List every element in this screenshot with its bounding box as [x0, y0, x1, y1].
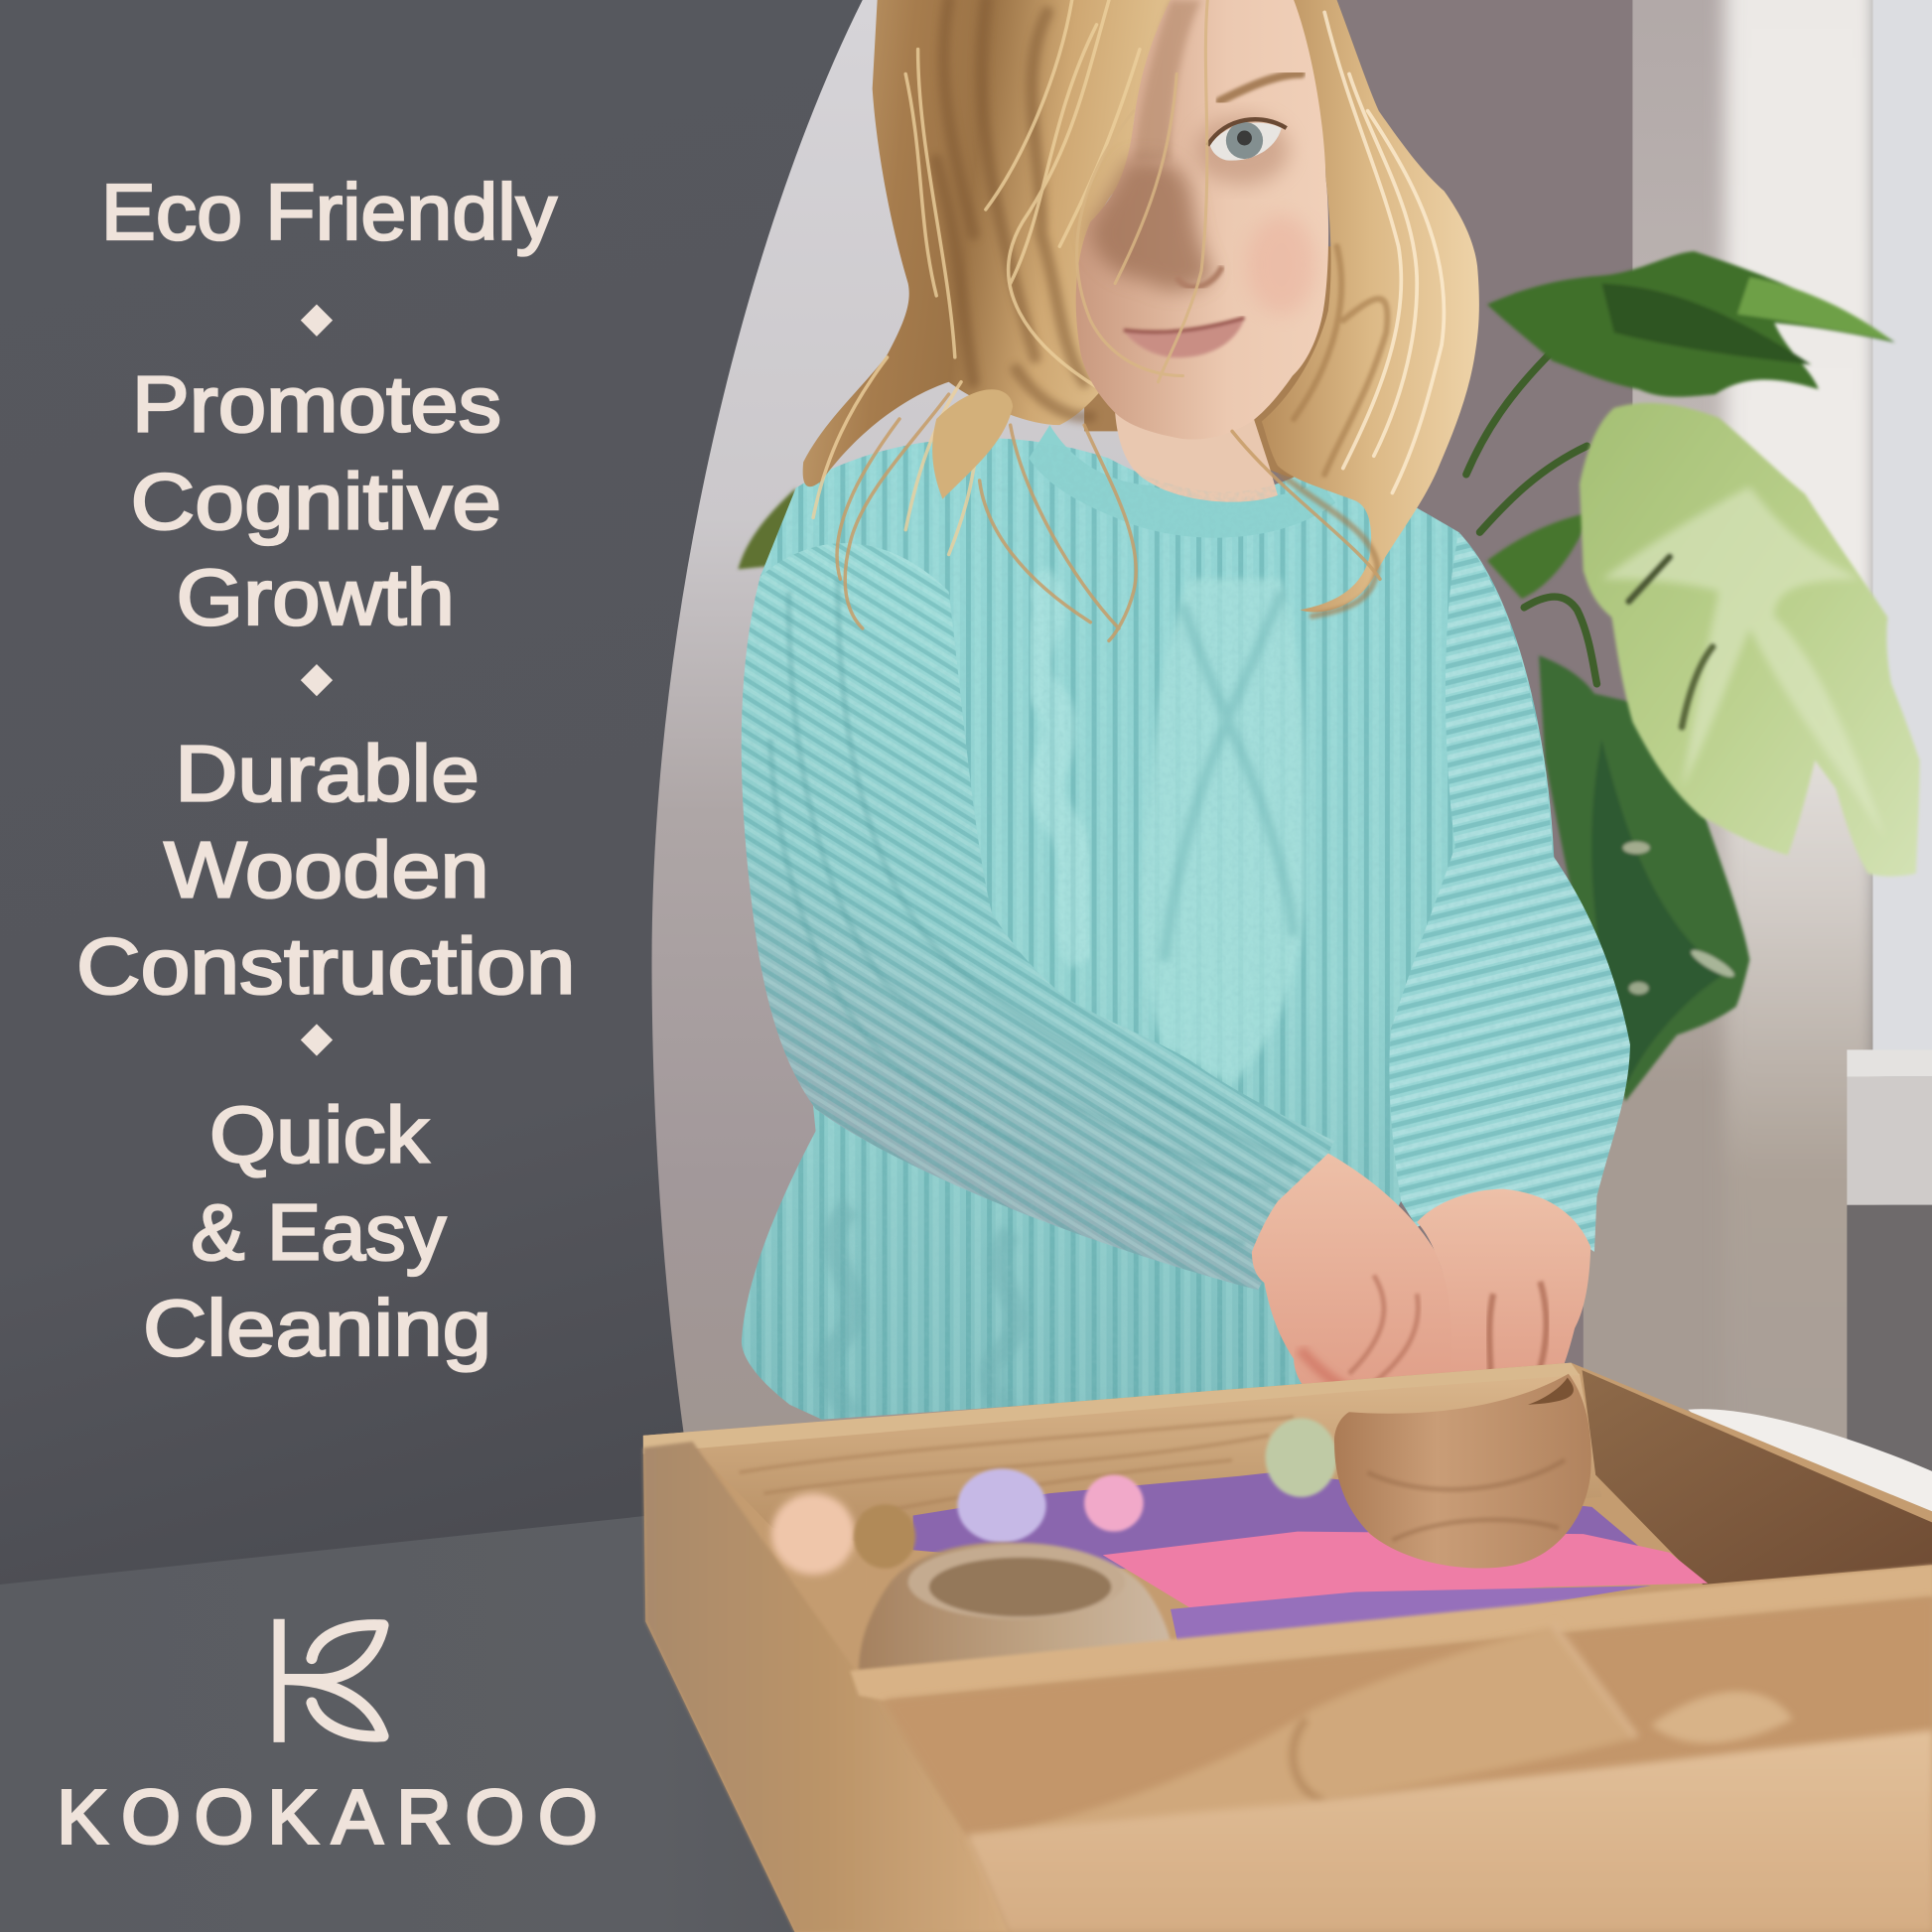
wall: right side — [1271, 0, 1632, 1368]
table edge — [1688, 1409, 1932, 1511]
rice: pink band — [1103, 1532, 1708, 1608]
panel: lighter lower logo band — [0, 1501, 936, 1932]
hair: behind neck and face — [1084, 246, 1330, 479]
sweater: hem cables — [827, 1207, 1016, 1417]
tool: wooden scoop — [967, 1624, 1793, 1849]
hand: right — [1417, 1189, 1590, 1405]
tray: silhouette — [643, 1363, 1932, 1932]
hair: right mass — [1262, 0, 1479, 617]
hair: left mass — [803, 0, 1176, 554]
pom-pom: green — [1266, 1418, 1337, 1497]
rice: purple front band — [1171, 1586, 1651, 1644]
tray: right inner wall — [1583, 1370, 1932, 1585]
text block: Promotes Cognitive Growth: Promotes — [132, 359, 501, 448]
hair: right strands — [1324, 12, 1444, 492]
pom-pom: peach — [771, 1493, 855, 1575]
text block: Durable Wooden Construction: Durable — [175, 730, 480, 818]
hair: shadow strands — [936, 0, 1090, 417]
face: cheek blush — [1247, 215, 1315, 314]
photo: girl at window — [640, 0, 1932, 1553]
icon: diamond divider 2 — [301, 664, 333, 696]
face: nose shadow — [1090, 159, 1213, 291]
tray: back rim — [643, 1363, 1580, 1453]
brand name: KOOKAROO — [57, 1775, 598, 1861]
plant: monstera — [738, 251, 1920, 1102]
icon: eye — [1195, 116, 1289, 185]
leaf: large pale — [1580, 403, 1920, 877]
text block: Promotes Cognitive Growth — [131, 359, 501, 641]
face — [1076, 0, 1328, 440]
hair: light strands — [813, 0, 1140, 554]
hand: left — [1252, 1154, 1456, 1409]
sweater: lower body — [727, 419, 1589, 1430]
plant stems — [1466, 351, 1596, 684]
bowl: peg doll — [854, 1504, 915, 1591]
hair: fine loose strands over sweater — [837, 394, 1380, 640]
sweater: knit grain overlay — [727, 419, 1639, 1430]
pom-pom: pink — [1084, 1475, 1144, 1532]
sweater: right sleeve — [1355, 517, 1651, 1282]
neck — [1115, 413, 1278, 502]
rice: purple back band — [913, 1472, 1639, 1589]
tray: divider rim — [850, 1565, 1932, 1701]
bowl: front left — [859, 1543, 1171, 1671]
leaf: dark lower — [1539, 655, 1749, 1102]
text block: Eco Friendly: Eco Friendly — [101, 168, 557, 256]
icon: Kookaroo K leaf logo — [279, 1619, 383, 1742]
leaf: dark upper fronds — [1487, 251, 1895, 397]
text block: Quick and Easy Cleaning: & Easy — [191, 1187, 447, 1276]
sweater: central cable — [1143, 579, 1307, 1084]
window — [1872, 0, 1932, 1059]
text block: Promotes Cognitive Growth: Growth — [176, 553, 455, 641]
text block: Durable Wooden Construction — [76, 730, 576, 1010]
hair: curl at shoulder — [932, 389, 1013, 499]
text block: Durable Wooden Construction: Wooden — [164, 825, 489, 913]
text block: Quick and Easy Cleaning: Cleaning — [143, 1284, 491, 1372]
tray: back wall inner — [690, 1374, 1601, 1550]
pom-pom: lavender — [957, 1468, 1046, 1543]
tray: wood grain — [740, 1417, 1294, 1516]
hair: front strands over face — [1077, 0, 1207, 382]
text block: Durable Wooden Construction: Construction — [76, 921, 576, 1010]
tray: wooden sensory tray — [643, 1363, 1932, 1932]
face: brow — [1220, 73, 1302, 101]
leaf: mid small — [1487, 512, 1590, 599]
bowl: back right — [1334, 1374, 1591, 1569]
sweater: left cable — [1035, 579, 1084, 961]
tray: lower compartment — [884, 1596, 1932, 1836]
window sill — [1847, 1049, 1932, 1488]
face: nose — [1176, 266, 1222, 287]
leaf: small behind shoulder — [738, 487, 796, 569]
icon: diamond divider 3 — [301, 1024, 333, 1056]
text block: Promotes Cognitive Growth: Cognitive — [131, 457, 501, 545]
curtain: bright sheer — [1715, 0, 1883, 1205]
text block: Quick and Easy Cleaning: Quick — [209, 1090, 429, 1178]
face: mouth — [1124, 318, 1244, 357]
text block: Quick and Easy Cleaning — [143, 1090, 491, 1372]
curtain: lower taupe fall — [1583, 1084, 1737, 1412]
face: hair shadow on forehead — [1134, 0, 1201, 160]
wall: left side — [651, 0, 1136, 1433]
tray: front rim blurred — [967, 1729, 1932, 1932]
sweater: left sleeve — [727, 530, 1355, 1307]
icon: diamond divider 1 — [301, 305, 333, 337]
curtain: shaded edge — [1632, 0, 1743, 1084]
tray: left rim — [643, 1442, 1008, 1932]
sweater: collar — [1029, 425, 1335, 538]
